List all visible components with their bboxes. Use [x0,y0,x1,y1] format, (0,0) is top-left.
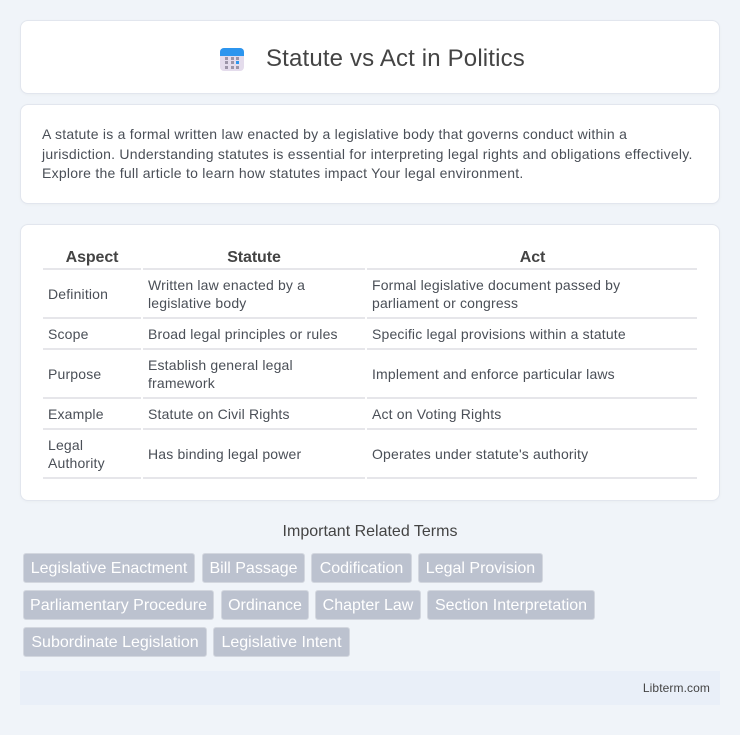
table content: legislative body [148,295,246,311]
row: Purpose: Purpose [48,366,101,382]
tag [311,553,412,583]
related terms tags [23,553,595,657]
row: Definition: Definition [48,286,108,302]
row: Legal Authority: Legal [48,437,83,453]
table content: parliament or congress [372,295,518,311]
header panel [20,20,720,94]
intro text: A statute is a formal written law enacted by a legislative body that governs conduct within a [42,126,627,142]
intro text: jurisdiction. Understanding statutes is essential for interpreting legal rights and obligations effectively. [42,146,693,162]
tag: Legal Provision [426,560,535,577]
tag: Legislative Enactment [31,560,187,577]
footer credit: Libterm.com [643,681,710,695]
tag: Subordinate Legislation [31,634,199,651]
footer [20,671,720,705]
table content [43,249,697,479]
column heading: Aspect: Aspect [66,249,118,266]
table content: Broad legal principles or rules [148,326,338,342]
row: Legal Authority: Authority [48,455,105,471]
title: Statute vs Act in Politics [266,45,525,72]
comparison table panel [20,224,720,501]
tag: Legislative Intent [221,634,342,651]
table content: Written law enacted by a [148,277,305,293]
table content: framework [148,375,215,391]
table content: Formal legislative document passed by [372,277,620,293]
tag [427,590,595,620]
table content: Statute on Civil Rights [148,406,290,422]
tag [23,590,214,620]
tag [23,553,195,583]
column heading: Act: Act [520,249,545,266]
intro text [42,126,693,181]
tag: Section Interpretation [435,597,587,614]
row: Scope: Scope [48,326,89,342]
icon: calendar [220,48,244,71]
row: Example: Example [48,406,104,422]
table content: Has binding legal power [148,446,301,462]
tag: Parliamentary Procedure [30,597,207,614]
table content: Specific legal provisions within a statute [372,326,626,342]
tag: Bill Passage [209,560,298,577]
tag [315,590,421,620]
tag [213,627,350,657]
intro panel [20,104,720,204]
tag [202,553,305,583]
intro text: Explore the full article to learn how statutes impact Your legal environment. [42,165,524,181]
table content: Implement and enforce particular laws [372,366,615,382]
tag: Codification [320,560,403,577]
tag [221,590,309,620]
tag [418,553,543,583]
table content: Operates under statute's authority [372,446,588,462]
related terms heading: Important Related Terms [283,523,457,540]
tag [23,627,207,657]
table content: Act on Voting Rights [372,406,501,422]
tag: Ordinance [228,597,302,614]
column heading: Statute: Statute [227,249,281,266]
tag: Chapter Law [323,597,413,614]
row: Legal Authority [48,437,105,471]
table content: Establish general legal [148,357,293,373]
